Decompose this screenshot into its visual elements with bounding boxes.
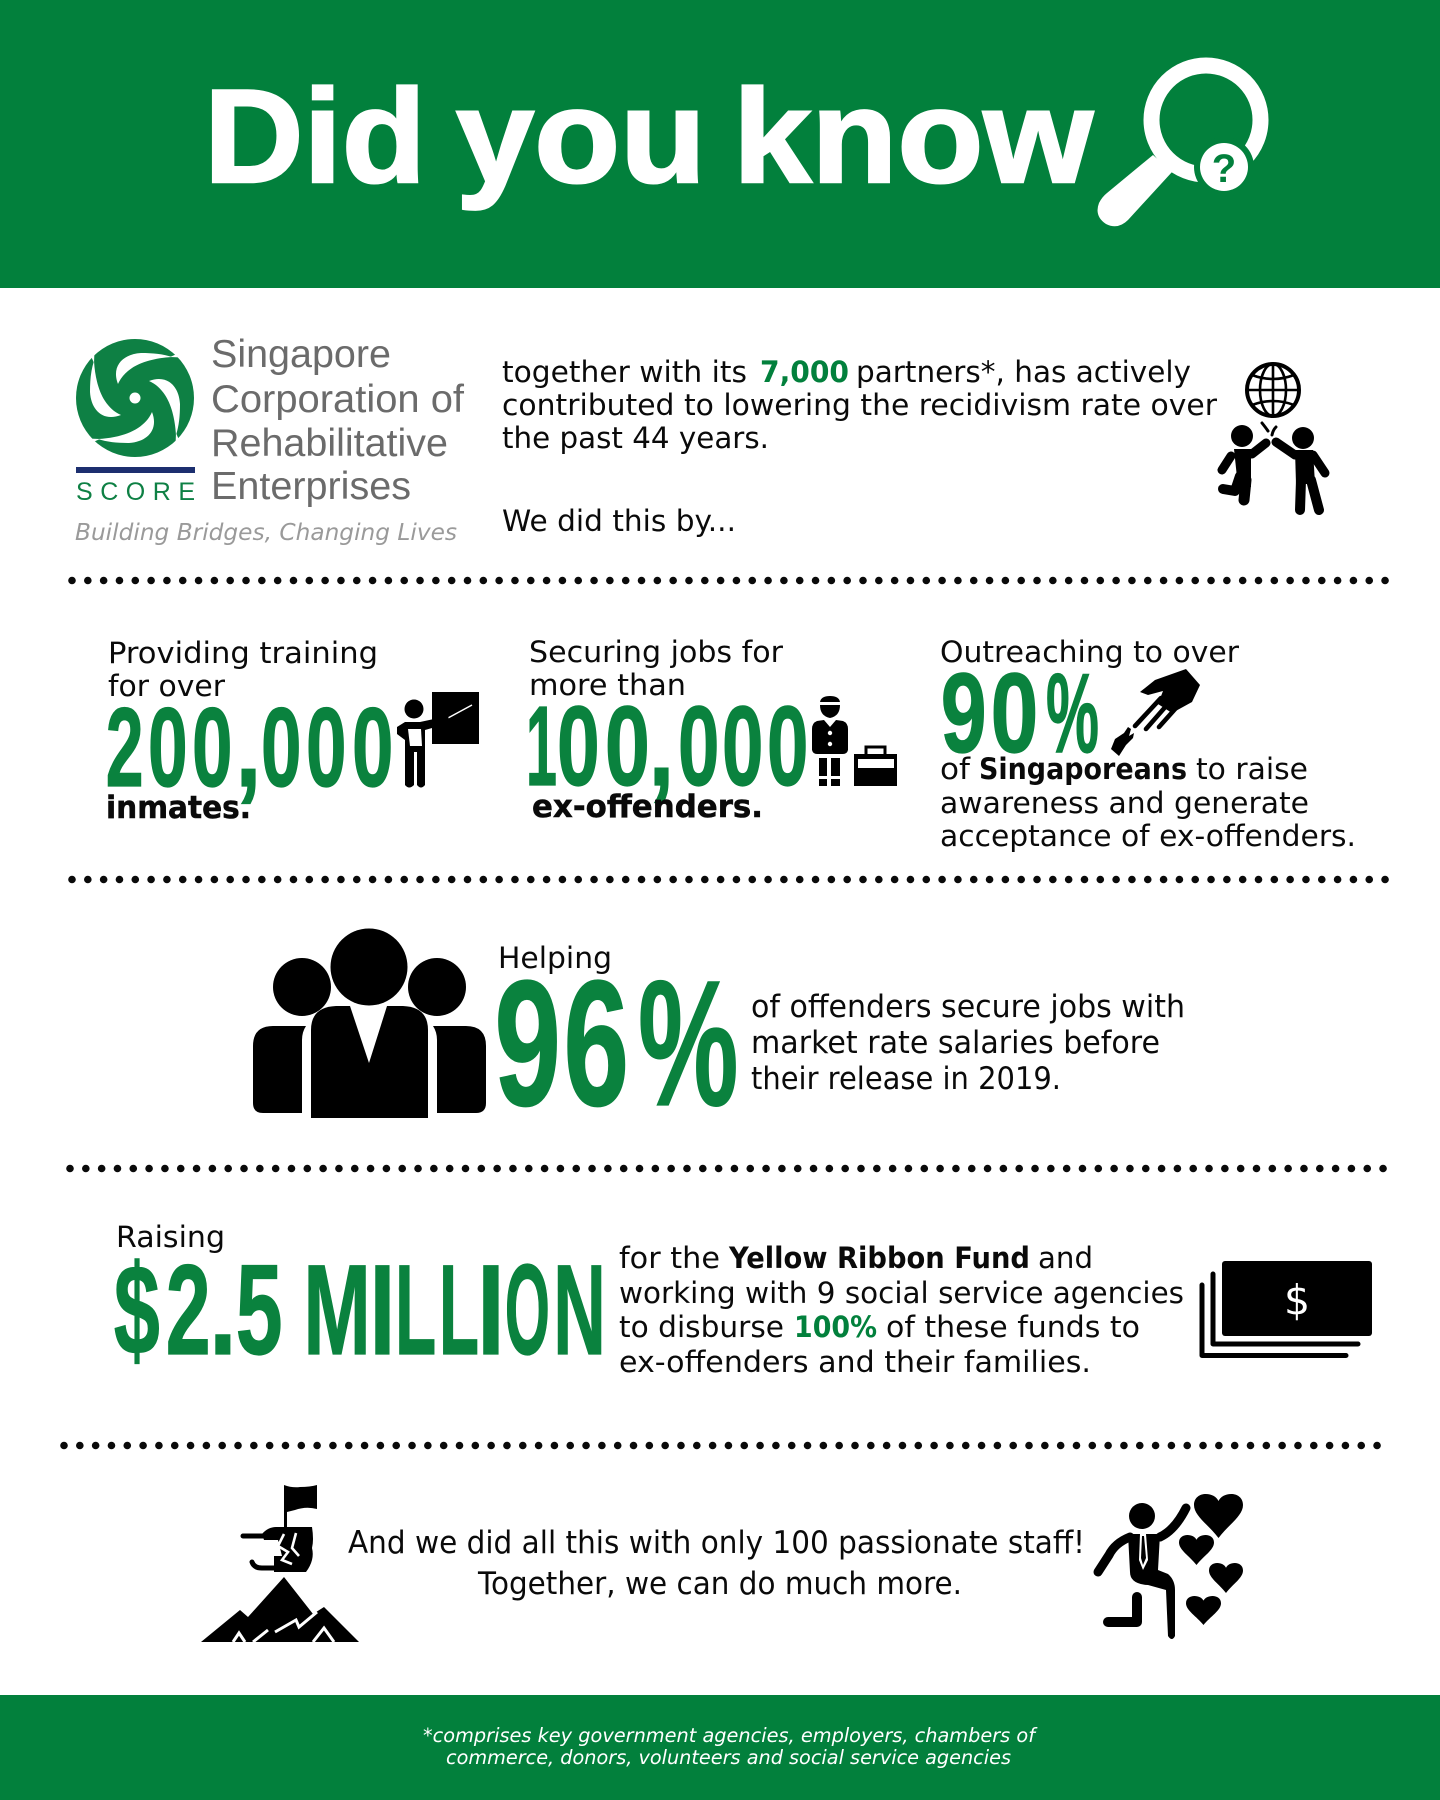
icon: globe and two people high-fiving — [1222, 364, 1325, 510]
icon: man in suit — [812, 696, 848, 786]
panel: outreach stat: awareness and generate — [940, 786, 1309, 820]
footnote text: *comprises key government agencies, employers, chambers of — [423, 1724, 1038, 1747]
number: $2.5 million: L — [395, 1239, 436, 1382]
number: $2.5 million: L — [439, 1239, 479, 1382]
text block: introduction: together with its — [502, 355, 747, 389]
panel: jobs stat: ex-offenders. — [532, 789, 763, 825]
panel: footer — [0, 1695, 1440, 1800]
number: 100,000: 0 — [605, 683, 650, 809]
number: 100,000: , — [648, 683, 674, 809]
panel: outreach stat: Outreaching to over — [940, 635, 1239, 669]
panel: fundraising stat: Yellow Ribbon Fund — [728, 1241, 1030, 1275]
panel: outreach stat — [940, 635, 1356, 853]
panel: closing message — [201, 1485, 1243, 1642]
title: Did — [204, 63, 426, 211]
panel: fundraising stat: and — [1038, 1241, 1093, 1275]
number: $2.5 million: 2 — [166, 1239, 211, 1382]
logo name text — [211, 333, 464, 508]
logo rule — [76, 467, 195, 473]
text block: closing statement — [348, 1525, 1085, 1602]
number: $2.5 million: N — [553, 1239, 606, 1382]
text block: closing statement: And we did all this with only 100 passionate staff! — [348, 1525, 1085, 1561]
number: 200,000: 0 — [306, 685, 346, 810]
footnote text — [423, 1724, 1038, 1769]
icon: stack of banknotes — [1202, 1261, 1372, 1356]
number: 90%: 9 — [941, 650, 987, 776]
icon: hand planting flag on mountain — [201, 1485, 359, 1642]
text block: introduction: 7,000 — [760, 355, 849, 389]
panel: SCORE logo — [75, 333, 464, 546]
text block: introduction: contributed to lowering the recidivism rate over — [502, 388, 1217, 422]
title: you — [456, 63, 706, 211]
title: know — [733, 63, 1094, 211]
number: 96%: % — [638, 943, 738, 1143]
icon: climbing man with hearts — [1098, 1494, 1243, 1639]
number: 200,000: 2 — [106, 685, 144, 810]
logo name text: Enterprises — [211, 465, 411, 508]
number: $2.5 million: I — [477, 1239, 505, 1382]
panel: outreach stat: acceptance of ex-offenders. — [940, 819, 1356, 853]
panel: outreach stat: to raise — [1196, 752, 1308, 786]
icon: magnifying glass with question mark: ? — [1212, 147, 1236, 191]
panel: training stat — [106, 636, 479, 826]
number: 200,000: 0 — [148, 685, 188, 810]
number: $2.5 million: I — [370, 1239, 395, 1382]
logo name text: Singapore — [211, 333, 391, 376]
panel: jobs stat — [526, 635, 897, 825]
number: $2.5 million: O — [505, 1239, 550, 1382]
footnote text: commerce, donors, volunteers and social service agencies — [446, 1746, 1011, 1769]
panel: fundraising stat: of these funds to — [886, 1310, 1140, 1344]
tagline: Building Bridges, Changing Lives — [75, 520, 457, 546]
text block: closing statement: Together, we can do much more. — [477, 1566, 962, 1602]
number: 200,000: 0 — [352, 685, 393, 810]
icon: magnifying glass with question mark — [1098, 66, 1260, 226]
panel: fundraising stat: ex-offenders and their families. — [619, 1345, 1091, 1379]
number: 100,000: 0 — [557, 683, 600, 809]
logo name text: Corporation of — [211, 378, 464, 421]
number: $2.5 million: M — [303, 1239, 371, 1382]
panel: training stat: Providing training — [108, 636, 378, 670]
number: 200,000: 0 — [261, 685, 302, 810]
number: 200,000: 0 — [192, 685, 232, 810]
number: 200,000: , — [236, 685, 261, 810]
number: 96%: 6 — [563, 943, 629, 1143]
text block: introduction: partners*, has actively — [856, 355, 1191, 389]
panel: 96 percent stat: market rate salaries before — [751, 1025, 1160, 1061]
panel: outreach stat: of — [940, 752, 971, 786]
number: 100,000: 0 — [767, 683, 808, 809]
panel: fundraising stat: 100% — [794, 1310, 877, 1344]
panel: training stat: inmates. — [106, 790, 251, 826]
icon: briefcase — [854, 747, 897, 786]
panel: fundraising stat: for the — [619, 1241, 720, 1275]
panel: outreach stat: Singaporeans — [979, 752, 1187, 786]
panel: jobs stat: more than — [529, 668, 686, 702]
panel: header banner — [0, 0, 1440, 288]
icon: stack of banknotes: $ — [1284, 1276, 1310, 1324]
logo wordmark SCORE: SCORE — [76, 478, 195, 506]
icon: two reaching hands — [1111, 669, 1200, 756]
panel: 96 percent stat — [253, 928, 1185, 1143]
panel: 96 percent stat: their release in 2019. — [751, 1061, 1061, 1097]
panel: fundraising stat: Raising — [116, 1220, 225, 1254]
number: 96%: 9 — [494, 943, 561, 1143]
panel: fundraising stat: to disburse — [619, 1310, 784, 1344]
text block: introduction: We did this by... — [502, 504, 736, 538]
number: 100,000: 0 — [678, 683, 719, 809]
panel: fundraising stat — [114, 1220, 1372, 1382]
text block: introduction — [502, 355, 1217, 538]
panel: jobs stat: Securing jobs for — [529, 635, 783, 669]
number: $2.5 million: 5 — [236, 1239, 283, 1382]
panel: training stat: for over — [108, 669, 225, 703]
panel: 96 percent stat: Helping — [498, 941, 612, 975]
number: 90%: 0 — [991, 650, 1038, 776]
number: 90%: % — [1046, 650, 1099, 776]
icon: swirl logo mark — [75, 338, 195, 458]
panel: 96 percent stat: of offenders secure jobs with — [751, 989, 1185, 1025]
number: $2.5 million: $ — [114, 1239, 160, 1382]
number: $2.5 million: . — [209, 1239, 237, 1382]
number: 100,000: 0 — [722, 683, 763, 809]
icon: group of three people — [253, 928, 486, 1118]
panel: fundraising stat: working with 9 social service agencies — [619, 1276, 1184, 1310]
icon: teacher at board — [397, 692, 479, 788]
text block: introduction: the past 44 years. — [502, 421, 769, 455]
number: 100,000: 1 — [526, 683, 557, 809]
logo name text: Rehabilitative — [211, 422, 448, 465]
